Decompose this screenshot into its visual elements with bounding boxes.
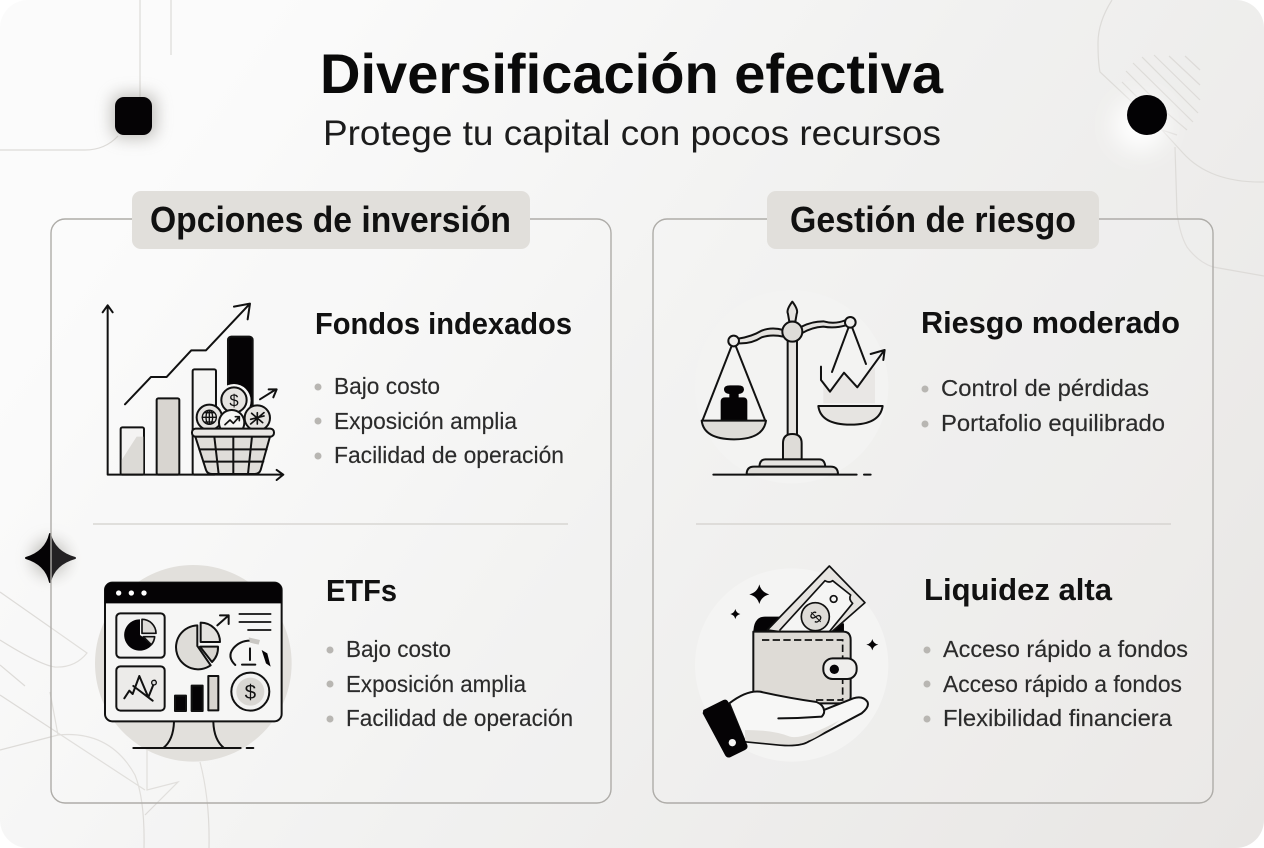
icon: growth chart with basket: $ [229,391,239,410]
text block: etfs: Facilidad de operación [346,705,573,731]
heading tab: gestión de riesgo [767,191,1099,249]
text block: riesgo moderado: Riesgo moderado [921,305,1180,340]
heading tab: opciones de inversión [132,191,530,249]
title: Diversificación efectiva [320,42,944,105]
text block: liquidez alta: Liquidez alta [924,572,1113,607]
text block: riesgo moderado: Control de pérdidas [941,375,1149,401]
subtitle: Protege tu capital con pocos recursos [323,114,941,153]
text block: fondos indexados: Facilidad de operación [334,442,564,468]
heading tab: opciones de inversión: Opciones de inversión [150,199,511,240]
decorative circle [1114,95,1167,151]
icon: dashboard monitor: $ [245,681,257,704]
text block: fondos indexados: Exposición amplia [334,408,517,434]
icon: dashboard monitor [95,565,292,762]
text block: riesgo moderado [921,305,1180,436]
text block: fondos indexados: Fondos indexados [315,306,572,341]
decorative rounded square [112,94,156,138]
icon: growth chart with basket [103,304,283,480]
text block: etfs: Exposición amplia [346,671,526,697]
icon: wallet in hand: $ [806,607,826,627]
text block: etfs: ETFs [326,573,397,608]
text block: liquidez alta [924,572,1188,731]
icon: wallet in hand [695,566,888,762]
icon: balance scale [695,290,888,483]
panel: gestión de riesgo [653,191,1213,803]
text block: etfs [326,573,573,731]
text block: liquidez alta: Acceso rápido a fondos [943,636,1188,662]
decorative sparkle [26,534,75,582]
text block: liquidez alta: Flexibilidad financiera [943,705,1172,731]
text block: riesgo moderado: Portafolio equilibrado [941,410,1165,436]
heading tab: gestión de riesgo: Gestión de riesgo [790,199,1076,240]
panel: opciones de inversión [51,191,611,803]
text block: fondos indexados [314,306,572,468]
text block: liquidez alta: Acceso rápido a fondos [943,671,1182,697]
text block: fondos indexados: Bajo costo [334,373,440,399]
text block: etfs: Bajo costo [346,636,451,662]
